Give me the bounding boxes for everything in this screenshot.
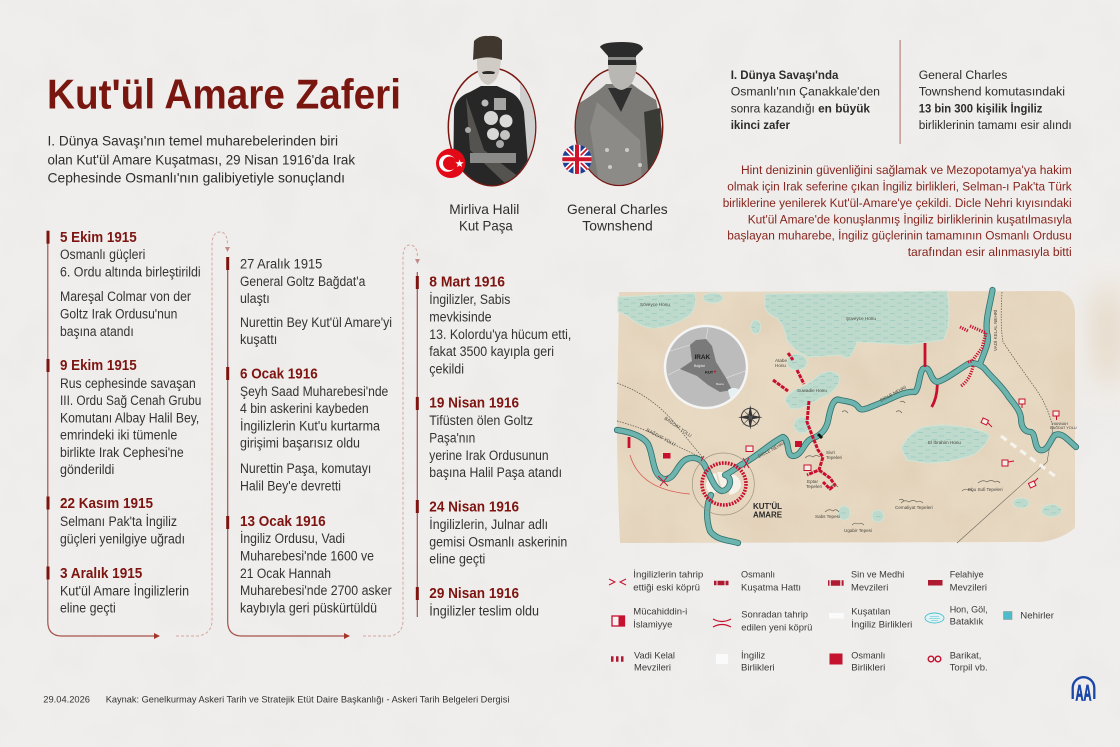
event: 9 Ekim 1915: gönderildi [60,462,114,477]
legend: later destroyed new bridge: Sonradan tahrip [741,609,808,620]
map labels: Ebu Sufi Tepeleri [968,487,1003,492]
red summary paragraph: birliklerine yenilerek Kut'ül-Amare'ye çekildi. Dicle Nehri kıyısındaki [723,196,1072,210]
event: 5 Ekim 1915: 6. Ordu altında birleştirildi [60,264,201,280]
event: 6 Ocak 1916: girişimi başarısız oldu [240,436,360,451]
legend: Ottoman units: Osmanlı [851,649,885,660]
legend: Felahiye positions: Mevzileri [950,581,987,592]
event: 24 Nisan 1916: 24 Nisan 1916 [429,500,519,516]
map labels: BAĞDAT YOLU [646,427,677,447]
intro text [48,134,355,185]
timeline column 3 [416,272,571,618]
callout: British troops captured: Townshend komutasındaki [919,85,1065,99]
portrait: Halil Kut Paşa [448,36,540,190]
legend: British units [716,649,775,672]
map labels [640,302,1077,533]
intro text: olan Kut'ül Amare Kuşatması, 29 Nisan 1916'da Irak [48,152,355,167]
legend: besieged British units [829,606,912,629]
event: 27 Aralık 1915: ulaştı [240,291,270,306]
name: Mirliva Halil Kut Paşa [449,202,519,233]
timeline column 1 [46,230,230,639]
divider [900,40,901,144]
map labels: Suwadie Honu [797,388,827,393]
besieged British positions at Kut [706,472,741,495]
troop markers [663,441,802,458]
event: 22 Kasım 1915: 22 Kasım 1915 [60,496,153,512]
map [610,285,1080,550]
legend: rivers [1004,609,1054,620]
arrow head 1 [154,633,160,639]
event: 5 Ekim 1915 [60,230,201,339]
event: 24 Nisan 1916: İngilizlerin, Julnar adlı [429,517,548,532]
event: 8 Mart 1916: 13. Kolordu'ya hücum etti, [429,327,571,342]
callout: second greatest victory: I. Dünya Savaşı'nda [731,68,838,82]
dashed connector 2 [363,245,418,636]
event: 9 Ekim 1915: birlikte Irak Cephesi'ne [60,445,184,460]
markers 3 [416,276,419,600]
map labels: Ugabir Tepesi [844,528,872,533]
event: 3 Aralık 1915: Kut'ül Amare İngilizlerin [60,583,189,598]
legend: Mücahiddin-i İslamiyye: İslamiyye [633,618,672,629]
event: 5 Ekim 1915: başına atandı [60,324,134,339]
event: 5 Ekim 1915: 5 Ekim 1915 [60,230,137,246]
map labels: Söveyce Honu [640,302,670,307]
legend: siege line: Osmanlı [741,569,775,580]
legend: Vadi Kelal positions: Vadi Kelal [634,649,675,660]
map labels: Cemaliyat Tepeleri [895,505,933,510]
red summary paragraph [723,163,1072,259]
legend: British units: Birlikleri [741,661,775,672]
name: Mirliva Halil Kut Paşa: Kut Paşa [459,218,513,233]
footer source line: 29.04.2026 [43,694,90,704]
lakes and marshes [618,291,1062,522]
legend: Mücahiddin-i İslamiyye: Mücahiddin-i [633,606,687,617]
red summary paragraph: olmak için Irak seferine çıkan İngiliz birlikleri, Selman-ı Pak'ta Türk [727,180,1072,194]
event: 22 Kasım 1915 [60,496,185,546]
intro text: I. Dünya Savaşı'nın temel muharebelerinden biri [48,134,338,149]
event: 22 Kasım 1915: güçleri yenilgiye uğradı [60,531,185,546]
legend: Vadi Kelal positions [611,649,675,672]
map labels: BAĞDAT YOLU [1050,425,1077,430]
legend: Sin and Medhi positions: Mevzileri [851,581,888,592]
red summary paragraph: tarafından esir alınmasıyla bitti [908,245,1072,259]
event: 13 Ocak 1916: Muharebesi'nde 2700 asker [240,583,392,598]
callout: British troops captured: birliklerinin tamamı esir alındı [919,118,1072,132]
legend: later destroyed new bridge: edilen yeni köprü [741,622,812,633]
map labels: BAĞDAT YOLU [663,415,693,438]
map labels: Şüveyce Honu [846,316,876,321]
legend: Ottoman units [830,649,885,672]
event: 9 Ekim 1915: emrindeki iki tümenle [60,428,177,442]
event: 3 Aralık 1915: eline geçti [60,601,116,616]
event: 19 Nisan 1916: başına Halil Paşa atandı [429,465,562,480]
event: 13 Ocak 1916: 13 Ocak 1916 [240,514,326,530]
event: 5 Ekim 1915: Goltz Irak Ordusu'nun [60,306,177,322]
event: 3 Aralık 1915: 3 Aralık 1915 [60,566,142,582]
intro text: Cephesinde Osmanlı'nın galibiyetiyle sonuçlandı [48,170,345,185]
legend: lake and marsh: Hon, Göl, [950,604,988,615]
map labels: Atabe [775,358,787,363]
event: 24 Nisan 1916 [429,500,567,567]
event: 27 Aralık 1915: General Goltz Bağdat'a [240,274,366,289]
event: 9 Ekim 1915: III. Ordu Sağ Cenah Grubu [60,393,201,408]
event: 27 Aralık 1915: kuşattı [240,332,277,347]
event: 13 Ocak 1916: Muharebesi'nde 1600 ve [240,548,374,564]
legend: siege line [714,569,801,592]
event: 13 Ocak 1916 [240,514,392,616]
British positions [1001,436,1059,479]
event: 19 Nisan 1916 [429,396,562,480]
event: 13 Ocak 1916: 21 Ocak Hannah [240,566,331,581]
Felahiye lines [629,343,937,448]
legend: besieged British units: Kuşatılan [851,606,890,617]
inset locator map: KUT [705,370,714,374]
event: 27 Aralık 1915: Nurettin Bey Kut'ül Amare'yi [240,315,392,330]
dashed arrow head 2 [415,259,420,264]
inset locator map [665,326,748,408]
map labels: Tepeleri [826,455,842,460]
event: 8 Mart 1916: mevkisinde [429,310,492,324]
legend: destroyed old bridge: ettiği eski köprü [633,581,700,592]
hills [805,401,1000,525]
Kut'ül Amare label: KUT'ÜL [753,502,782,511]
event: 29 Nisan 1916: İngilizler teslim oldu [429,603,539,618]
markers 2 [226,257,229,529]
title: Kut'ül Amare Zaferi [47,70,401,117]
flag: United Kingdom [562,144,592,175]
map labels: HANNAH [1052,422,1068,426]
Ottoman lines [773,353,835,489]
dashed connector 1 [176,232,228,636]
event: 6 Ocak 1916: Halil Bey'e devretti [240,478,341,493]
rivers [617,290,1076,543]
portrait: Charles Townshend [574,42,665,190]
markers 1 [46,231,50,579]
event: 19 Nisan 1916: yerine Irak Ordusunun [429,448,549,463]
dashed arrow head 1 [225,247,230,252]
timeline line 2 [228,257,345,636]
legend: Ottoman units: Birlikleri [851,661,885,672]
event: 8 Mart 1916: çekildi [429,362,464,376]
event: 5 Ekim 1915: Mareşal Colmar von der [60,289,191,304]
event: 13 Ocak 1916: İngiliz Ordusu, Vadi [240,531,345,546]
compass rose [738,405,763,430]
map labels: Eptar [807,479,818,484]
event: 8 Mart 1916: İngilizler, Sabis [429,292,511,307]
callout: second greatest victory: ikinci zafer [731,118,790,132]
legend: Sin and Medhi positions: Sin ve Medhi [851,569,904,580]
event: 9 Ekim 1915: 9 Ekim 1915 [60,358,137,374]
legend: besieged British units: İngiliz Birlikleri [851,618,912,629]
timeline column 2 [226,245,420,639]
legend: barricade and mines: Torpil vb. [950,661,988,672]
logo: AA [1073,677,1094,705]
timeline line 1 [48,231,155,636]
event: 6 Ocak 1916: İngilizlerin Kut'u kurtarma [240,418,381,433]
Vadi Kelal lines [960,326,986,386]
legend: British units: İngiliz [741,649,766,660]
event: 29 Nisan 1916 [429,586,539,618]
callout: British troops captured: General Charles [919,68,1007,82]
legend: siege line: Kuşatma Hattı [741,581,801,592]
event: 8 Mart 1916 [429,275,571,376]
Kut'ül Amare label [753,502,783,520]
inset locator map: Bağdat [694,364,705,368]
red summary paragraph: Kut'ül Amare'de konuşlanmış İngiliz birliklerinin kuşatılmasıyla [748,212,1072,226]
map labels: DİCLE NEHRİ [879,384,907,403]
callout: second greatest victory [731,68,880,132]
legend: barricade and mines [928,649,988,672]
event: 6 Ocak 1916: Nurettin Paşa, komutayı [240,461,371,476]
legend: destroyed old bridge [609,569,703,592]
road to Sheikh Saad [957,428,1053,543]
legend: later destroyed new bridge [713,609,812,633]
name: General Charles Townshend [567,202,668,233]
inset locator map: IRAK [694,354,711,361]
name: General Charles Townshend: Townshend [582,218,653,233]
event: 8 Mart 1916: fakat 3500 kayıpla geri [429,344,554,359]
Kut'ül Amare label: AMARE [753,510,783,520]
event: 24 Nisan 1916: eline geçti [429,552,485,567]
event: 9 Ekim 1915: Rus cephesinde savaşan [60,376,196,391]
event: 8 Mart 1916: 8 Mart 1916 [429,275,505,291]
event: 19 Nisan 1916: Paşa'nın [429,431,475,446]
event: 27 Aralık 1915: 27 Aralık 1915 [240,257,322,272]
map labels: Tepeleri [806,484,822,489]
timeline line 3 [416,272,418,617]
event: 19 Nisan 1916: Tifüsten ölen Goltz [429,413,533,428]
bridges [658,456,749,486]
map labels: Sivri [826,450,835,455]
event: 3 Aralık 1915 [60,566,189,616]
event: 6 Ocak 1916: 6 Ocak 1916 [240,366,318,382]
event: 6 Ocak 1916 [240,366,388,493]
event: 9 Ekim 1915 [60,358,201,477]
map labels: Sabs Tepesi [815,514,840,519]
legend: Vadi Kelal positions: Mevzileri [634,661,671,672]
legend: lake and marsh: Bataklık [950,615,984,626]
map labels: El İbrahim Honu [928,439,961,445]
red summary paragraph: Hint denizinin güvenliğini sağlamak ve Mezopotamya'ya hakim [741,163,1072,177]
legend: barricade and mines: Barikat, [950,649,981,660]
map labels: DİCLE NEHRİ [757,440,785,459]
event: 19 Nisan 1916: 19 Nisan 1916 [429,396,519,412]
legend: Sin and Medhi positions [828,569,904,592]
flag: Turkey [436,149,465,178]
name: General Charles Townshend: General Charles [567,202,668,217]
red summary paragraph: başlayan muharebe, İngiliz güçlerinin tamamının Osmanlı Ordusu [727,229,1072,243]
legend [609,569,1054,672]
callout: second greatest victory: Osmanlı'nın Çanakkale'den [731,85,880,99]
name: Mirliva Halil Kut Paşa: Mirliva Halil [449,202,519,217]
event: 29 Nisan 1916: 29 Nisan 1916 [429,586,519,602]
inset locator map: Basra [716,382,724,386]
map paper [610,285,1080,550]
event: 5 Ekim 1915: Osmanlı güçleri [60,247,145,262]
callout: British troops captured [919,68,1072,132]
legend: destroyed old bridge: İngilizlerin tahrip [633,569,703,580]
event: 9 Ekim 1915: Komutanı Albay Halil Bey, [60,410,199,425]
event: 27 Aralık 1915 [240,257,392,347]
map labels: Honu [775,363,786,368]
legend: lake and marsh [925,604,988,626]
event: 6 Ocak 1916: 4 bin askerini kaybeden [240,401,369,416]
map labels: VADİ KELAL NEHRİ [992,310,998,351]
advance arrow [630,455,690,494]
callout: second greatest victory: sonra kazandığı en büyük [731,101,870,115]
arrow head 2 [344,633,350,639]
footer source line: Kaynak: Genelkurmay Askeri Tarih ve Stratejik Etüt Daire Başkanlığı - Askeri Tarih Belgeleri Dergisi [106,694,509,704]
callout: British troops captured: 13 bin 300 kişilik İngiliz [919,100,1042,115]
legend: Mücahiddin-i İslamiyye [612,606,687,629]
event: 13 Ocak 1916: kaybıyla geri püskürtüldü [240,600,377,616]
Kut siege rings [692,453,754,515]
event: 22 Kasım 1915: Selmanı Pak'ta İngiliz [60,514,177,529]
event: 24 Nisan 1916: gemisi Osmanlı askerinin [429,534,567,549]
roads [617,292,1053,458]
legend: Felahiye positions: Felahiye [950,569,984,580]
event: 6 Ocak 1916: Şeyh Saad Muharebesi'nde [240,384,388,399]
legend: Felahiye positions [928,569,987,592]
logo: AA: AA [1076,680,1092,705]
legend: rivers: Nehirler [1020,609,1054,620]
